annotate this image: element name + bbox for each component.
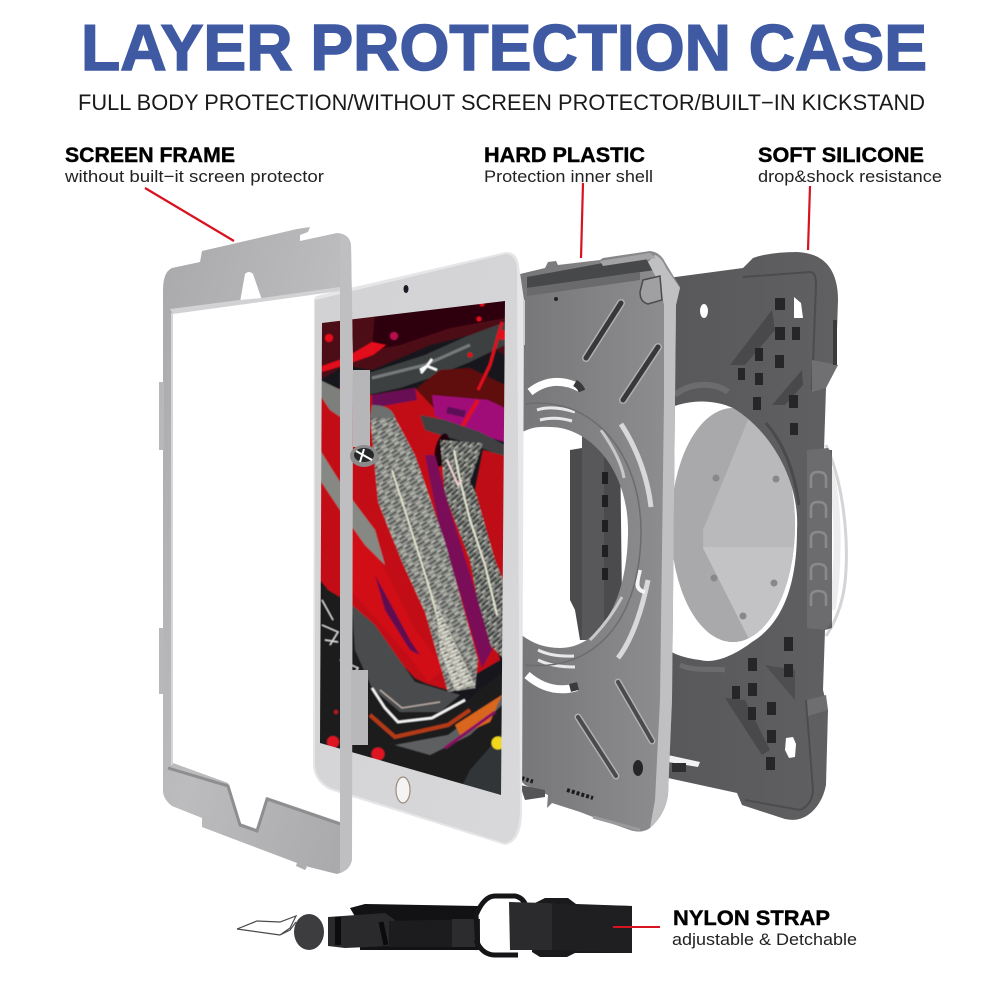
left grey ribbons — [322, 380, 340, 418]
white cut-outs — [794, 297, 803, 318]
label: screen frame: SCREEN FRAME — [65, 144, 235, 167]
rib ridge shapes — [730, 310, 775, 365]
ipad body — [313, 252, 524, 845]
label: soft silicone: drop&shock resistance — [758, 167, 942, 186]
lattice square holes — [732, 298, 800, 770]
callout arrow: hard plastic — [581, 183, 583, 258]
hard plastic shell — [510, 251, 680, 832]
right strip over the ipad — [340, 235, 353, 873]
streak two — [440, 440, 505, 660]
corner latch — [640, 276, 662, 304]
top notch cutout — [240, 272, 262, 302]
label: nylon strap — [672, 907, 857, 949]
label: hard plastic: HARD PLASTIC — [484, 144, 645, 167]
label: hard plastic: Protection inner shell — [484, 167, 653, 186]
bottom swirl — [322, 589, 496, 749]
silicone body — [665, 252, 838, 820]
magenta ribbon — [425, 455, 492, 668]
label: screen frame: without built−it screen protector — [64, 167, 324, 186]
label: nylon strap: NYLON STRAP — [673, 907, 830, 930]
lanyard disc — [294, 914, 324, 950]
kickstand seen through shell — [570, 432, 622, 640]
dark mid swirl — [420, 415, 505, 458]
lanyard loop — [237, 916, 296, 935]
magenta flow — [432, 395, 505, 442]
callout arrow: screen frame — [145, 188, 234, 241]
upper guide tab — [353, 370, 370, 447]
clear rotating handle ring — [826, 445, 846, 636]
callout arrow: nylon strap — [613, 926, 660, 928]
diagonal slots — [578, 303, 658, 776]
screen artwork — [315, 295, 510, 800]
label: screen frame — [64, 144, 324, 186]
main red — [320, 385, 500, 690]
d ring — [476, 896, 527, 950]
top inner rim — [527, 258, 655, 288]
label: nylon strap: adjustable & Detchable — [672, 930, 857, 949]
frame body — [163, 227, 353, 874]
ipad — [313, 252, 524, 845]
ring outline — [525, 403, 641, 666]
callout arrow: soft silicone — [808, 186, 810, 250]
soft silicone layer — [660, 252, 846, 820]
rotating disc — [674, 408, 795, 642]
streak one — [370, 415, 478, 692]
main strap — [532, 898, 632, 957]
woven strap — [389, 919, 478, 947]
title: LAYER PROTECTION CASE — [81, 11, 927, 84]
buckle — [328, 913, 395, 948]
label: hard plastic — [484, 144, 653, 186]
home button — [396, 777, 410, 803]
label: soft silicone — [758, 144, 942, 186]
left edge tab — [159, 382, 164, 450]
white splash — [420, 359, 437, 373]
front camera — [404, 285, 408, 293]
ipad side buttons — [523, 300, 525, 345]
screen frame — [159, 227, 378, 874]
ipad bezel — [315, 254, 520, 843]
label: soft silicone: SOFT SILICONE — [758, 144, 924, 167]
lower guide tab — [351, 670, 368, 745]
back band — [350, 904, 478, 950]
nylon strap — [237, 896, 632, 957]
small holes and hex vents — [554, 297, 558, 301]
dark red sky — [322, 316, 505, 380]
side grip handle — [807, 448, 832, 630]
outer bumper shading — [743, 272, 816, 810]
dark grey band — [340, 322, 505, 394]
ring arc slots — [530, 382, 580, 392]
right white edge strip — [648, 255, 680, 828]
dark red blot — [416, 367, 504, 408]
subtitle: FULL BODY PROTECTION/WITHOUT SCREEN PROTECTOR/BUILT−IN KICKSTAND — [78, 90, 925, 115]
frame hole over the screen — [350, 445, 378, 467]
